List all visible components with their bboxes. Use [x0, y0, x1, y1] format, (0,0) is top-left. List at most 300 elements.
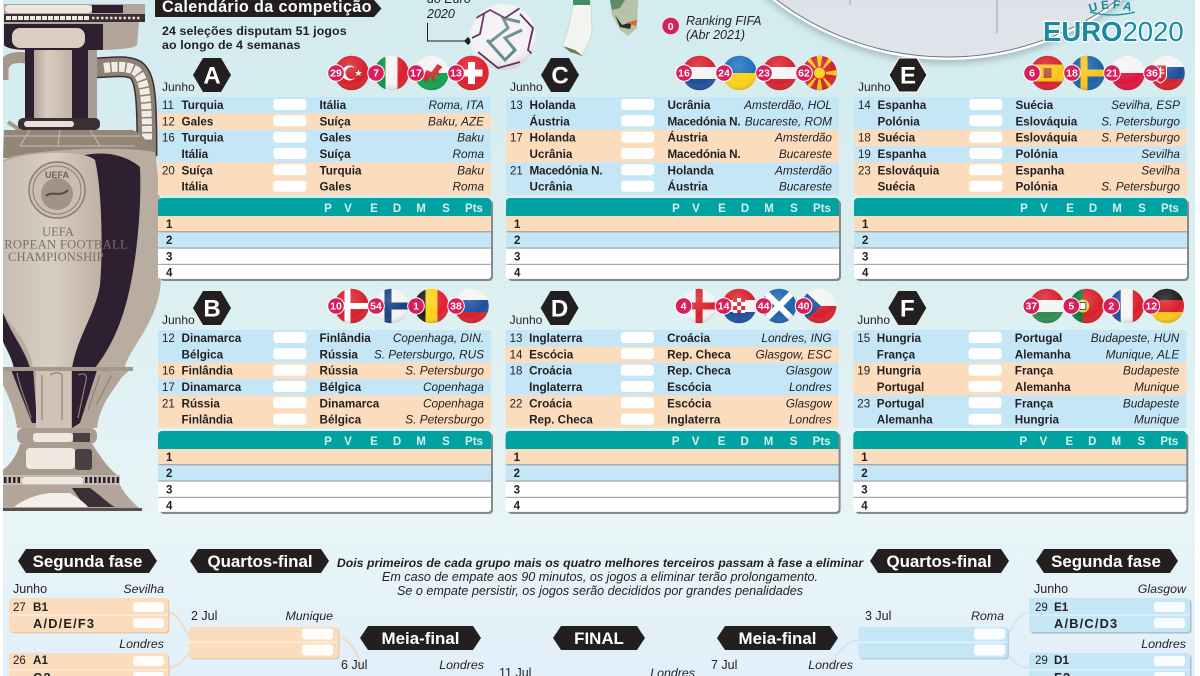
trophy UEFA emblem: UEFA	[45, 170, 69, 180]
semi-final and final date labels: 7 Jul	[711, 658, 737, 672]
group F flags: 5	[1068, 301, 1074, 313]
group B standings	[158, 431, 493, 514]
qualification notes: Dois primeiros de cada grupo mais os quatro melhores terceiros passam à fase a eliminar	[337, 556, 864, 570]
legend: FIFA ranking: (Abr 2021)	[686, 28, 745, 42]
group C fixtures: Ucrânia	[668, 99, 711, 112]
group B fixtures: Finlândia	[320, 332, 371, 345]
heading: Meia-final left: Meia-final	[382, 629, 459, 648]
group B fixtures: 17	[162, 382, 175, 394]
qualification notes: Em caso de empate aos 90 minutos, os jogos a eliminar terão prolongamento.	[382, 570, 818, 584]
bracket: right quarter-final: 3 Jul	[865, 609, 891, 623]
group F fixtures: França	[1015, 397, 1054, 410]
group E header	[858, 58, 927, 94]
heading: Segunda fase left	[18, 549, 157, 573]
group D fixtures: Croácia	[529, 397, 572, 410]
group F fixtures: Alemanha	[1015, 348, 1071, 361]
group B fixtures: Dinamarca	[182, 332, 242, 345]
group E standings: S	[1138, 203, 1146, 215]
group C fixtures: 21	[510, 165, 523, 177]
group B fixtures: Bélgica	[320, 381, 362, 394]
group F header	[857, 291, 926, 327]
group C standings: S	[790, 203, 798, 215]
heading: Meia-final right	[717, 626, 838, 650]
group C fixtures: Amsterdão	[774, 131, 832, 145]
group B header: Junho	[162, 313, 195, 327]
group B fixtures: Bélgica	[320, 414, 362, 427]
group B standings: 2	[166, 468, 172, 480]
group E flags	[1024, 55, 1186, 91]
group B header	[162, 291, 231, 327]
group A fixtures: Turquia	[320, 164, 362, 177]
legend: FIFA ranking: 0	[668, 21, 674, 33]
heading: Quartos-final right: Quartos-final	[886, 552, 992, 571]
logo: UEFA Euro 2020: EURO2020	[1043, 16, 1184, 47]
group A standings: Pts	[465, 203, 483, 215]
group A fixtures: Suíça	[182, 164, 213, 177]
group C standings: Pts	[813, 203, 831, 215]
trophy body	[3, 149, 162, 368]
group B fixtures: Dinamarca	[182, 381, 242, 394]
group F fixtures: Hungria	[1015, 414, 1059, 427]
group E standings: 1	[862, 219, 869, 231]
group A fixtures: Gales	[320, 181, 352, 194]
group E fixtures	[854, 97, 1187, 195]
bracket: right round of 16: Londres	[1141, 637, 1186, 651]
group E fixtures: Eslováquia	[1016, 115, 1078, 128]
trophy handles	[3, 57, 147, 156]
bracket: left round of 16: 27	[13, 602, 26, 614]
group F fixtures: França	[877, 348, 916, 361]
group C fixtures: Bucareste	[779, 147, 832, 161]
group A fixtures: Suíça	[320, 115, 351, 128]
group B flags: 54	[370, 301, 382, 313]
group D standings: 3	[514, 484, 520, 496]
group C fixtures	[506, 97, 839, 195]
group B standings: V	[344, 436, 352, 448]
group F fixtures: Munique	[1134, 380, 1180, 394]
group A fixtures: 11	[162, 100, 174, 112]
intro text: 24 seleções disputam 51 jogos	[162, 24, 347, 38]
group D fixtures: Londres, ING	[761, 331, 832, 345]
bracket: left round of 16: Londres	[119, 637, 164, 651]
group E fixtures: Suécia	[1016, 99, 1054, 112]
group A fixtures: Baku, AZE	[428, 114, 484, 128]
group C fixtures: Holanda	[530, 99, 576, 112]
group B fixtures: Copenhaga	[423, 380, 484, 394]
trophy engraved text	[3, 228, 127, 261]
bracket: right round of 16: 29	[1035, 602, 1048, 614]
group C standings: 3	[514, 252, 520, 264]
group F standings: Pts	[1160, 436, 1178, 448]
connectors	[168, 612, 1028, 668]
group E standings	[854, 198, 1189, 281]
group E fixtures: 14	[858, 100, 871, 112]
group A header: Junho	[162, 80, 195, 94]
group F flags: 2	[1108, 301, 1114, 313]
group F standings: D	[1088, 436, 1096, 448]
group C fixtures: Amsterdão, HOL	[743, 98, 832, 112]
group C standings: M	[764, 203, 774, 215]
group F fixtures: Budapeste	[1123, 364, 1180, 378]
group B fixtures: Rússia	[320, 365, 358, 378]
group E fixtures: Eslováquia	[878, 164, 940, 177]
trophy shoulder	[3, 130, 157, 158]
group E header: E	[900, 62, 916, 90]
group A fixtures: Itália	[320, 99, 347, 112]
icon: football boots	[562, 0, 638, 56]
group D standings: M	[764, 436, 773, 448]
group F standings: S	[1137, 436, 1145, 448]
bracket: left round of 16: A/D/E/F3	[33, 616, 95, 631]
group C fixtures: Ucrânia	[530, 148, 573, 161]
semi-final and final date labels	[341, 658, 853, 676]
bracket: left quarter-final: Munique	[285, 609, 333, 623]
group A fixtures: Turquia	[182, 99, 224, 112]
group C fixtures: Amsterdão	[774, 163, 832, 177]
group D fixtures: 22	[510, 398, 522, 410]
group C flags: 23	[758, 68, 770, 80]
group F standings: 1	[861, 452, 868, 464]
semi-final and final date labels: 6 Jul	[341, 658, 367, 672]
group F standings: M	[1112, 436, 1121, 448]
group D standings: S	[790, 436, 798, 448]
group D header	[510, 291, 579, 327]
bracket: right round of 16: E1	[1054, 601, 1069, 614]
group D fixtures	[506, 330, 839, 428]
group F fixtures: Alemanha	[877, 414, 933, 427]
heading: Quartos-final left: Quartos-final	[207, 552, 313, 571]
group F fixtures: Munique, ALE	[1106, 347, 1179, 361]
group F fixtures: 15	[857, 333, 870, 345]
trophy UEFA emblem	[29, 162, 85, 218]
legend: FIFA ranking	[662, 14, 762, 42]
group E standings: 2	[862, 235, 868, 247]
group A fixtures: Itália	[182, 181, 209, 194]
group E flags: 36	[1146, 68, 1158, 80]
group D fixtures: Escócia	[667, 381, 712, 394]
group D header: D	[551, 296, 568, 322]
group D fixtures: 13	[510, 333, 522, 345]
group D standings: 1	[514, 452, 521, 464]
page edge margins	[0, 0, 3, 676]
group E fixtures: Polónia	[1016, 148, 1058, 161]
group E fixtures: 19	[858, 149, 871, 161]
group B standings: 3	[166, 484, 172, 496]
group F flags: 12	[1145, 301, 1157, 313]
group D fixtures: Rep. Checa	[529, 414, 593, 427]
group A fixtures: Roma	[453, 180, 484, 194]
group C fixtures: Macedónia N.	[530, 164, 602, 177]
group C fixtures: Bucareste, ROM	[745, 114, 832, 128]
group D fixtures: Inglaterra	[667, 414, 721, 427]
group C fixtures: Áustria	[668, 132, 708, 145]
intro text: ao longo de 4 semanas	[162, 38, 300, 52]
group B fixtures: S. Petersburgo	[405, 364, 484, 378]
group B fixtures	[158, 330, 491, 428]
group E fixtures: S. Petersburgo	[1101, 131, 1180, 145]
group A standings	[158, 198, 493, 281]
group B flags	[328, 288, 490, 324]
group B standings: 1	[166, 452, 173, 464]
group F flags: 37	[1025, 301, 1037, 313]
group D fixtures: 14	[510, 349, 523, 361]
group D flags: 40	[798, 301, 810, 313]
logo: UEFA Euro 2020	[1043, 0, 1184, 47]
group A fixtures: 20	[162, 165, 175, 177]
group E fixtures: Suécia	[878, 132, 916, 145]
group A flags	[328, 55, 490, 91]
semi-final and final date labels: Londres	[808, 658, 853, 672]
group C standings: D	[741, 203, 749, 215]
group B standings: Pts	[465, 436, 483, 448]
group A flags: 29	[330, 68, 342, 80]
group B fixtures: S. Petersburgo	[405, 413, 484, 427]
group C fixtures: Bucareste	[779, 180, 832, 194]
group F fixtures: Portugal	[877, 381, 924, 394]
bracket: right quarter-final: Roma	[971, 609, 1004, 623]
group B fixtures: 21	[162, 398, 175, 410]
group A standings: 1	[166, 219, 173, 231]
bracket: left round of 16	[9, 582, 170, 676]
ball caption and leader	[426, 0, 472, 45]
group E fixtures: Polónia	[1016, 181, 1058, 194]
panel: group A	[158, 55, 493, 281]
group E header: Junho	[858, 80, 891, 94]
group C header: C	[551, 62, 569, 90]
group A standings: 2	[166, 235, 172, 247]
trophy foot	[3, 367, 142, 511]
group A fixtures: 16	[162, 133, 175, 145]
group D standings: Pts	[813, 436, 831, 448]
legend: FIFA ranking: Ranking FIFA	[686, 14, 762, 28]
group B fixtures: Dinamarca	[320, 397, 380, 410]
group D fixtures: Escócia	[667, 397, 712, 410]
bracket: right round of 16: Junho	[1034, 582, 1068, 596]
bracket: right round of 16: A/B/C/D3	[1054, 616, 1118, 631]
group C fixtures: 17	[510, 133, 523, 145]
group E fixtures: 23	[858, 165, 871, 177]
group F fixtures	[853, 330, 1186, 428]
group E fixtures: Espanha	[1016, 164, 1065, 177]
group D flags: 4	[681, 301, 687, 313]
group F standings: 3	[861, 484, 868, 496]
group A fixtures	[158, 97, 491, 195]
group C flags: 16	[678, 68, 690, 80]
heading: Meia-final right: Meia-final	[739, 629, 816, 648]
group E standings: M	[1112, 203, 1122, 215]
group F fixtures: França	[1015, 365, 1054, 378]
group D fixtures: Londres	[789, 380, 832, 394]
group D fixtures: Glasgow, ESC	[756, 347, 832, 361]
group D standings: P	[672, 436, 680, 448]
intro text	[162, 24, 347, 52]
icon: match ball	[470, 4, 536, 70]
group B standings: P	[324, 436, 332, 448]
bracket: left round of 16: B1	[33, 601, 48, 614]
group F fixtures: Budapeste, HUN	[1091, 331, 1180, 345]
trophy engraved text: UEFA	[42, 225, 74, 239]
group A fixtures: Roma	[453, 147, 484, 161]
group C fixtures: Macedónia N.	[668, 148, 740, 161]
group A standings: M	[416, 203, 426, 215]
group D standings: E	[718, 436, 726, 448]
group E fixtures: Polónia	[878, 115, 920, 128]
group E standings: 3	[862, 252, 868, 264]
group C standings	[506, 198, 841, 281]
group D fixtures: Rep. Checa	[667, 365, 731, 378]
bracket: left round of 16: A1	[33, 654, 48, 667]
semi-final and final date labels: Londres	[439, 658, 484, 672]
group B fixtures: S. Petersburgo, RUS	[374, 347, 484, 361]
group D fixtures: Glasgow	[786, 364, 833, 378]
trophy illustration	[0, 4, 162, 511]
heading: Quartos-final right	[870, 549, 1009, 573]
group F standings: P	[1019, 436, 1027, 448]
group F standings: E	[1065, 436, 1073, 448]
group D fixtures: Londres	[789, 413, 832, 427]
group B fixtures: 16	[162, 366, 175, 378]
group E fixtures: S. Petersburgo	[1101, 114, 1180, 128]
group A standings: 4	[166, 268, 173, 280]
qualification notes: Se o empate persistir, os jogos serão decididos por grandes penalidades	[397, 584, 804, 598]
group E standings: P	[1020, 203, 1028, 215]
group D flags: 44	[758, 301, 770, 313]
group C standings: 4	[514, 268, 521, 280]
group F fixtures: Alemanha	[1015, 381, 1071, 394]
heading: FINAL	[553, 626, 645, 650]
group A fixtures: Gales	[182, 115, 214, 128]
group F fixtures: Hungria	[877, 332, 921, 345]
group C fixtures: Ucrânia	[530, 181, 573, 194]
group A flags: 7	[373, 68, 379, 80]
group C header: Junho	[510, 80, 543, 94]
group B flags: 10	[330, 301, 342, 313]
group A standings: V	[344, 203, 352, 215]
group F flags	[1023, 288, 1185, 324]
group F fixtures: 19	[857, 366, 870, 378]
large ball graphic, top right	[662, 0, 1200, 63]
group B fixtures: 12	[162, 333, 175, 345]
group E standings: Pts	[1161, 203, 1179, 215]
group B standings: S	[442, 436, 450, 448]
group E fixtures: Suécia	[878, 181, 916, 194]
group D fixtures: Glasgow	[786, 396, 833, 410]
group D standings: 2	[514, 468, 520, 480]
ball caption and leader: 2020	[426, 7, 455, 21]
group F fixtures: Budapeste	[1123, 396, 1180, 410]
group B fixtures: Copenhaga	[423, 396, 484, 410]
group C fixtures: Áustria	[668, 181, 708, 194]
group A flags: 17	[410, 68, 422, 80]
group A header	[162, 58, 231, 94]
bracket: right quarter-final	[858, 609, 1009, 660]
group B fixtures: Bélgica	[182, 348, 224, 361]
group A standings: E	[370, 203, 378, 215]
heading: Segunda fase right: Segunda fase	[1051, 552, 1161, 571]
group A standings: S	[442, 203, 450, 215]
group E standings: D	[1089, 203, 1097, 215]
group B fixtures: Finlândia	[182, 414, 233, 427]
panel: group D	[506, 288, 841, 514]
group C fixtures: Áustria	[530, 115, 570, 128]
group C flags: 62	[798, 68, 810, 80]
group E fixtures: Sevilha	[1141, 147, 1180, 161]
group C flags	[676, 55, 838, 91]
group A fixtures: Turquia	[182, 132, 224, 145]
group C fixtures: Holanda	[530, 132, 576, 145]
group D flags: 14	[718, 301, 730, 313]
group E fixtures: Espanha	[878, 148, 927, 161]
group C fixtures: 13	[510, 100, 523, 112]
group C standings: P	[672, 203, 680, 215]
group F fixtures: Portugal	[877, 397, 924, 410]
group A flags: 13	[450, 68, 462, 80]
qualification notes	[337, 556, 864, 598]
group B fixtures: Finlândia	[182, 365, 233, 378]
group D fixtures: Inglaterra	[529, 381, 583, 394]
bracket: left quarter-final: 2 Jul	[191, 609, 217, 623]
group A standings: P	[324, 203, 332, 215]
panel: group F	[853, 288, 1188, 514]
group E standings: E	[1066, 203, 1074, 215]
group C fixtures: Holanda	[668, 164, 714, 177]
group D fixtures: 18	[510, 366, 522, 378]
bracket: right round of 16: Glasgow	[1138, 582, 1187, 596]
bracket: left round of 16: Junho	[13, 582, 47, 596]
heading: Meia-final left	[360, 626, 481, 650]
group D flags	[675, 288, 837, 324]
group D fixtures: Inglaterra	[529, 332, 583, 345]
group D standings: D	[740, 436, 749, 448]
bracket: right round of 16	[1029, 582, 1192, 676]
group E fixtures: 18	[858, 133, 871, 145]
group A standings: D	[393, 203, 401, 215]
group D standings	[506, 431, 841, 514]
group F standings: 2	[861, 468, 868, 480]
group A standings: 3	[166, 252, 172, 264]
group A fixtures: 12	[162, 116, 175, 128]
group C header	[510, 58, 579, 94]
panel: group B	[158, 288, 493, 514]
group D fixtures: Rep. Checa	[667, 348, 731, 361]
group E fixtures: Sevilha, ESP	[1111, 98, 1180, 112]
bracket: left quarter-final	[189, 609, 340, 660]
group D fixtures: Croácia	[529, 365, 572, 378]
group B flags: 38	[450, 301, 462, 313]
group F fixtures: 23	[857, 398, 870, 410]
group F fixtures: Munique	[1134, 413, 1180, 427]
heading: Segunda fase left: Segunda fase	[33, 552, 142, 571]
group B header: B	[203, 296, 221, 322]
group B standings: 4	[166, 500, 173, 512]
group F fixtures: Portugal	[1015, 332, 1062, 345]
group A fixtures: Suíça	[320, 148, 351, 161]
group C standings: V	[692, 203, 700, 215]
group C fixtures: Macedónia N.	[668, 115, 740, 128]
group E standings: 4	[862, 268, 869, 280]
trophy engraved text: CHAMPIONSHIP	[8, 250, 104, 264]
group C standings: 2	[514, 235, 520, 247]
group A fixtures: Gales	[320, 132, 352, 145]
group B standings: M	[416, 436, 426, 448]
bracket: left round of 16: 26	[13, 655, 26, 667]
group D fixtures: Escócia	[529, 348, 574, 361]
heading: FINAL: FINAL	[574, 629, 624, 648]
group A header: A	[203, 62, 221, 90]
group A fixtures: Baku	[457, 163, 484, 177]
bracket: right round of 16: 29	[1035, 655, 1048, 667]
group E flags: 18	[1066, 68, 1078, 80]
